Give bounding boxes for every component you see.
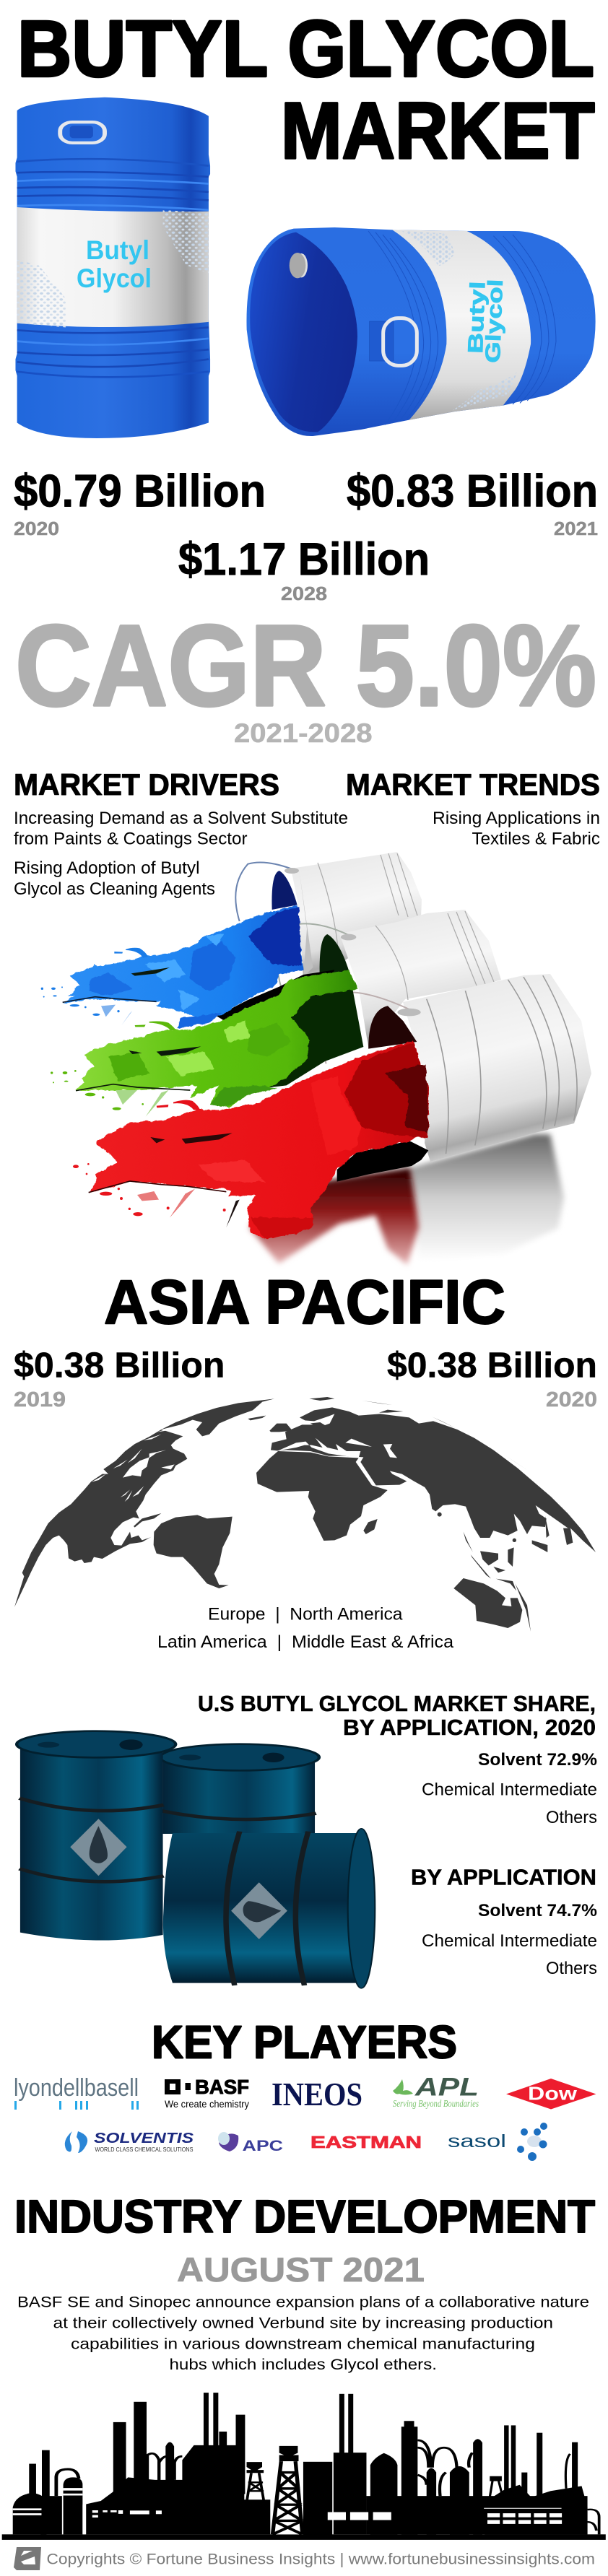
- stat: 2020 value: [14, 466, 266, 539]
- logo: APC: APC: [243, 2138, 283, 2154]
- stat: 2028 value: 2028: [281, 583, 327, 604]
- market drivers: Rising Adoption of Butyl: [14, 858, 199, 878]
- market drivers: [14, 767, 348, 899]
- stat: 2019 regional value: [14, 1346, 225, 1411]
- stat: 2028 value: [178, 534, 430, 604]
- market drivers: Glycol as Cleaning Agents: [14, 879, 215, 899]
- market drivers: from Paints & Coatings Sector: [14, 829, 247, 849]
- logo: LyondellBasell: [14, 2074, 139, 2110]
- icon: upright blue drum: Butyl: [86, 235, 149, 265]
- logo: LyondellBasell: lyondellbasell: [14, 2074, 139, 2102]
- stat: 2021 value: [347, 466, 598, 539]
- logo: Sasol: sasol: [448, 2131, 506, 2151]
- market drivers: MARKET DRIVERS: [14, 767, 279, 801]
- icon: tilted blue drum: [246, 227, 596, 436]
- application share: 2020: BY APPLICATION, 2020: [343, 1715, 596, 1740]
- application share: by application: Solvent 74.7%: [478, 1901, 597, 1920]
- heading: industry development: INDUSTRY DEVELOPMENT: [14, 2190, 595, 2242]
- stat: 2020 regional value: 2020: [546, 1388, 597, 1411]
- illustration: paint buckets spilling: [41, 852, 591, 1265]
- development description: hubs which includes Glycol ethers.: [169, 2356, 437, 2373]
- logo: Dow: [506, 2079, 596, 2110]
- world map: [14, 1397, 596, 1632]
- application share: 2020: U.S BUTYL GLYCOL MARKET SHARE,: [198, 1691, 596, 1716]
- stat: 2021 value: 2021: [554, 518, 598, 539]
- heading: key players: KEY PLAYERS: [152, 2016, 457, 2068]
- stat: 2020 value: 2020: [14, 518, 59, 539]
- icon: upright blue drum: [15, 97, 210, 438]
- icon: upright blue drum: Glycol: [77, 264, 152, 293]
- application share: 2020: Others: [546, 1808, 597, 1827]
- logo: Solventis: [65, 2131, 194, 2153]
- footer: copyright: Copyrights © Fortune Business Insights | www.fortunebusinessinsights.com: [46, 2551, 595, 2567]
- illustration: dark oil drums: [17, 1731, 375, 1988]
- logo: Eastman: EASTMAN: [310, 2133, 422, 2151]
- logo: BASF: [165, 2076, 249, 2110]
- logo: INEOS: INEOS: [272, 2076, 362, 2112]
- footer: copyright: [14, 2547, 595, 2570]
- application share: by application: Others: [546, 1959, 597, 1978]
- logo: BASF: We create chemistry: [165, 2099, 249, 2110]
- application share: 2020: Chemical Intermediate: [422, 1780, 597, 1799]
- logo: APL: APL: [414, 2074, 479, 2101]
- heading: Asia Pacific: ASIA PACIFIC: [104, 1268, 505, 1337]
- CAGR figure: 2021-2028: [234, 718, 373, 748]
- application share: by application: [411, 1864, 597, 1978]
- market trends: [346, 767, 600, 849]
- market trends: MARKET TRENDS: [346, 767, 600, 801]
- development description: BASF SE and Sinopec announce expansion plans of a collaborative nature: [17, 2293, 589, 2310]
- application share: 2020: Solvent 72.9%: [478, 1750, 597, 1770]
- logo: APC: [218, 2132, 283, 2154]
- logo: APL: Serving Beyond Boundaries: [393, 2099, 479, 2110]
- logo: BASF: BASF: [195, 2076, 249, 2098]
- stat: 2019 regional value: 2019: [14, 1388, 66, 1411]
- icon: tilted blue drum: Glycol: [482, 279, 508, 363]
- logo: APL: [393, 2074, 479, 2110]
- development description: [17, 2293, 589, 2373]
- stat: 2028 value: $1.17 Billion: [178, 534, 430, 585]
- icon: tilted blue drum: Butyl: [464, 281, 490, 354]
- market trends: Textiles & Fabric: [472, 829, 600, 849]
- development description: capabilities in various downstream chemical manufacturing: [71, 2335, 535, 2352]
- region list: Europe | North America: [208, 1604, 403, 1624]
- region list: Latin America | Middle East & Africa: [157, 1632, 453, 1652]
- market drivers: Increasing Demand as a Solvent Substitute: [14, 809, 348, 828]
- application share: 2020: [198, 1691, 597, 1827]
- development description: at their collectively owned Verbund site by increasing production: [53, 2315, 553, 2332]
- logo: Solventis: SOLVENTIS: [94, 2131, 194, 2146]
- stat: 2019 regional value: $0.38 Billion: [14, 1346, 225, 1385]
- stat: 2021 value: $0.83 Billion: [347, 466, 598, 517]
- logo: Dow: Dow: [528, 2082, 578, 2104]
- market trends: Rising Applications in: [433, 809, 600, 828]
- logo: Solventis: WORLD CLASS CHEMICAL SOLUTIONS: [95, 2146, 194, 2153]
- application share: by application: Chemical Intermediate: [422, 1931, 597, 1951]
- stat: 2020 value: $0.79 Billion: [14, 466, 266, 517]
- logo: Sasol: [448, 2123, 547, 2161]
- date: August 2021: AUGUST 2021: [177, 2250, 425, 2289]
- region list: [157, 1604, 453, 1652]
- illustration: industrial skyline: [2, 2393, 606, 2540]
- stat: 2020 regional value: $0.38 Billion: [387, 1346, 597, 1385]
- title: [17, 4, 595, 175]
- stat: 2020 regional value: [387, 1346, 597, 1411]
- application share: by application: BY APPLICATION: [411, 1864, 596, 1890]
